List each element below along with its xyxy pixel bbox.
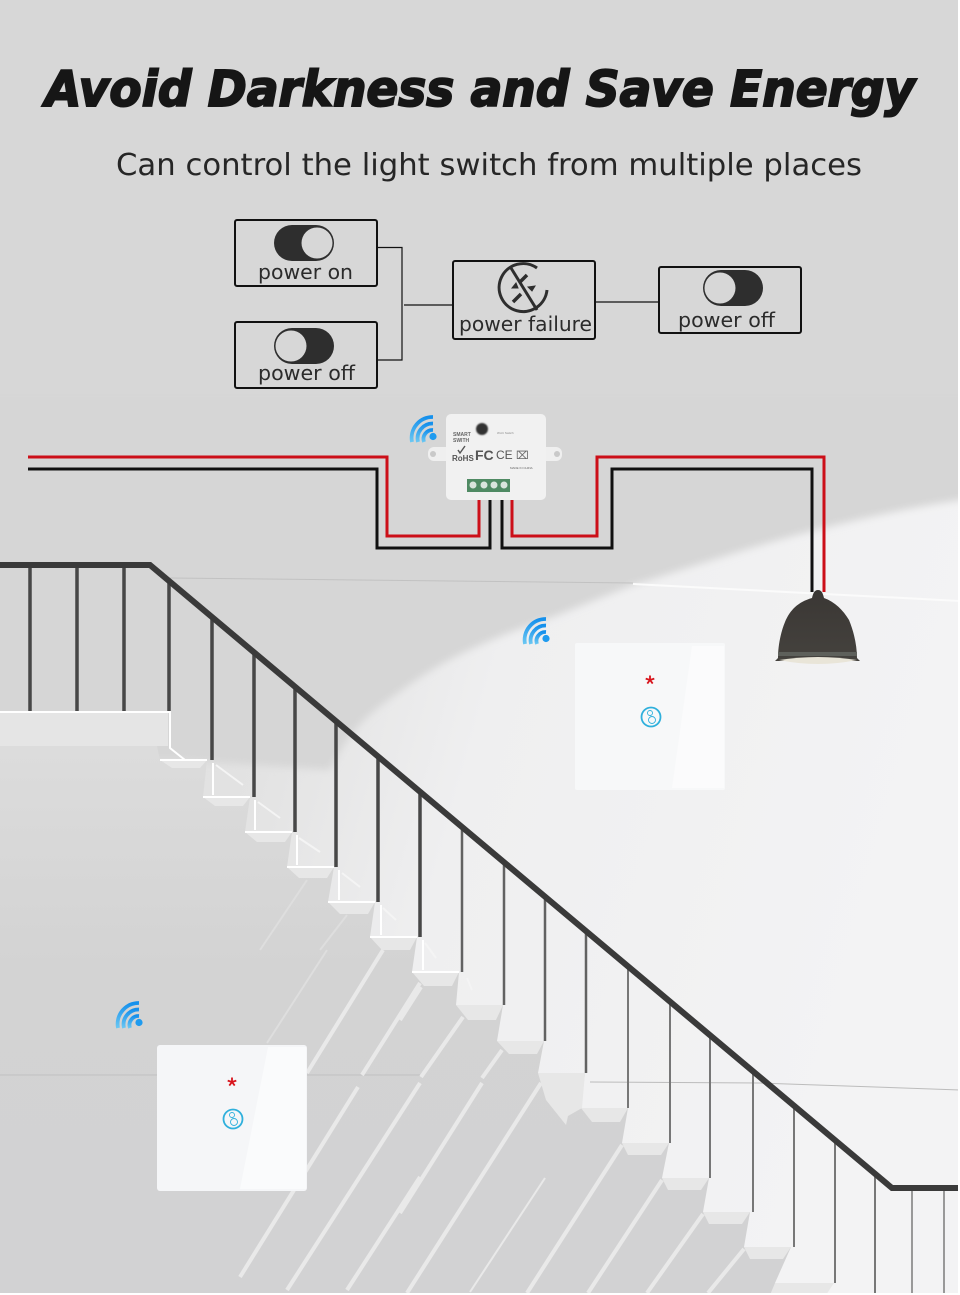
background: wall shadow (0, 400, 960, 770)
wall switch lower (157, 1045, 307, 1191)
touch button (224, 1110, 242, 1128)
railing posts (30, 565, 944, 1293)
wall seam line lower left (0, 1074, 420, 1076)
box: power failure (453, 261, 595, 339)
smart switch module: FC (475, 447, 494, 463)
terminal block (467, 479, 510, 492)
box: power off (left): power off (258, 361, 356, 385)
title: Avoid Darkness and Save Energy (41, 61, 917, 118)
box: power off (right): power off (678, 308, 776, 332)
state diagram (235, 220, 801, 388)
wiring (28, 457, 824, 592)
connector lines (377, 248, 659, 360)
stair white edges (0, 712, 472, 990)
indicator star (646, 676, 654, 684)
stair underside (0, 746, 834, 1295)
smart switch module: ⌧ (516, 450, 529, 462)
box: power on (235, 220, 377, 286)
icon: wifi upper wall switch (525, 619, 550, 644)
icon: no power (499, 264, 547, 312)
smart switch module: SMART (453, 432, 471, 438)
stair light streaks (240, 880, 744, 1293)
smart switch module: Wi-Fi Switch (497, 431, 514, 435)
smart switch module: CE (496, 448, 513, 462)
touch button (642, 708, 660, 726)
indicator star (228, 1078, 236, 1086)
railing handrail (0, 565, 960, 1188)
landing slab (0, 713, 168, 746)
background: top band (0, 0, 960, 436)
box: power on: power on (258, 260, 353, 284)
wall seam line upper left (170, 578, 633, 583)
stair treads (160, 760, 834, 1295)
subtitle: Can control the light switch from multiple places (116, 148, 862, 183)
smart switch module: RoHS (452, 454, 474, 463)
smart switch module: SWITH (453, 438, 469, 444)
smart switch module (428, 414, 562, 500)
wall seam line upper right (633, 584, 960, 601)
smart switch module: MADE IN CHINA (510, 466, 533, 470)
pendant lamp (775, 590, 860, 664)
box: power off (left) (235, 322, 377, 388)
icon: wifi lower wall switch (118, 1003, 143, 1028)
wall seam line lower right (590, 1082, 960, 1090)
box: power failure: power failure (459, 312, 592, 336)
icon: wifi at module (412, 417, 437, 442)
wall switch upper (575, 643, 725, 790)
background: lit wall (0, 436, 960, 1295)
box: power off (right) (659, 267, 801, 333)
